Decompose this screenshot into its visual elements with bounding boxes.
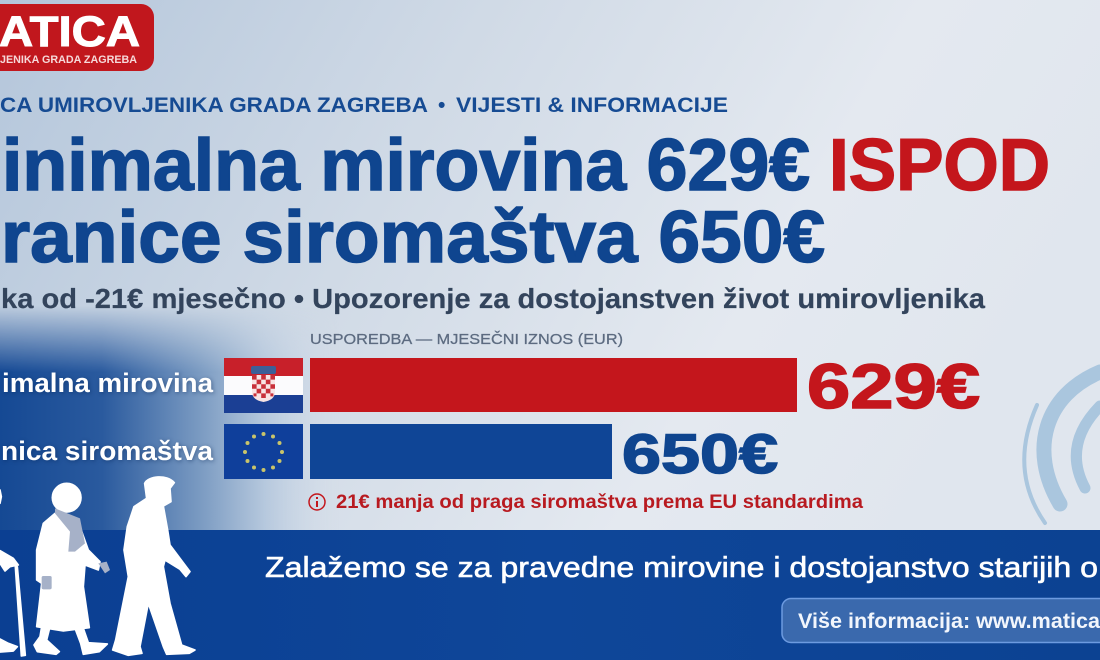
note: 21€ manja od praga siromaštva prema EU standardima xyxy=(336,492,863,513)
logo: ATICA xyxy=(0,8,140,56)
value: 650: 650€ xyxy=(622,422,778,485)
figure: man xyxy=(113,477,195,655)
subtitle: ka od -21€ mjesečno • Upozorenje za dostojanstven život umirovljenika xyxy=(1,283,985,314)
figure: left with cane xyxy=(0,490,25,656)
title: ranice siromaštva 650€ xyxy=(1,197,825,278)
bar: 650 xyxy=(310,424,612,479)
title: ISPOD xyxy=(829,125,1050,206)
icon: signal arcs xyxy=(1024,372,1100,523)
label: granica siromastva: nica siromaštva xyxy=(1,436,214,466)
bar: 629 xyxy=(310,358,797,412)
figure: woman xyxy=(34,483,110,654)
chart caption: USPOREDBA — MJESEČNI IZNOS (EUR) xyxy=(310,331,623,348)
title xyxy=(0,125,1050,278)
logo xyxy=(0,4,154,71)
footer band xyxy=(0,530,1100,660)
kicker line xyxy=(0,94,728,117)
value: 629: 629€ xyxy=(807,352,980,422)
link button xyxy=(782,598,1100,642)
icon: eu flag xyxy=(224,424,303,479)
footer slogan: Zalažemo se za pravedne mirovine i dostojanstvo starijih o xyxy=(265,552,1098,584)
label: minimalna mirovina: imalna mirovina xyxy=(2,368,214,398)
kicker line: CA UMIROVLJENIKA GRADA ZAGREBA xyxy=(0,94,428,117)
bar chart xyxy=(1,352,980,485)
title: inimalna mirovina 629€ xyxy=(2,125,810,206)
kicker line: • xyxy=(438,94,445,117)
background xyxy=(0,0,644,530)
logo: JENIKA GRADA ZAGREBA xyxy=(0,54,137,66)
kicker line: VIJESTI & INFORMACIJE xyxy=(456,94,728,117)
icon: croatian flag xyxy=(224,358,303,413)
icon: elderly people silhouettes xyxy=(0,477,195,656)
link button: Više informacija: www.matica xyxy=(798,610,1100,633)
